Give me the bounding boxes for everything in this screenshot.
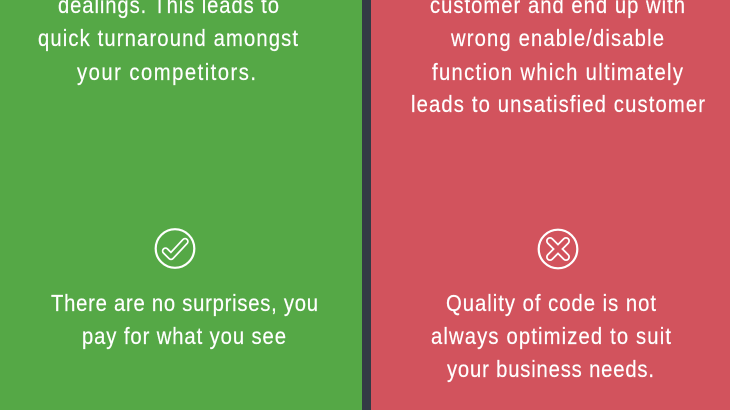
text block: turnaround: your competitors. [77,59,256,85]
text block: code quality: your business needs. [447,356,654,382]
text block: unsatisfied customer: function which ultimately [432,59,683,85]
text block: no surprises: There are no surprises, you [51,290,318,316]
text block: code quality [431,290,671,382]
text block: no surprises: pay for what you see [82,323,286,349]
text block: no surprises [51,290,318,349]
icon: check mark in circle [156,229,194,268]
panel: pros (green) [0,0,362,410]
panel: cons (red) [371,0,730,410]
text block: turnaround [38,0,298,85]
text block: code quality: always optimized to suit [431,323,671,349]
text block: code quality: Quality of code is not [446,290,656,316]
text block: turnaround: quick turnaround amongst [38,25,298,51]
text block: unsatisfied customer: leads to unsatisfied customer [411,91,705,117]
text block: unsatisfied customer: wrong enable/disable [450,25,664,51]
text block: unsatisfied customer [411,0,705,117]
icon: cross in circle [539,230,577,268]
